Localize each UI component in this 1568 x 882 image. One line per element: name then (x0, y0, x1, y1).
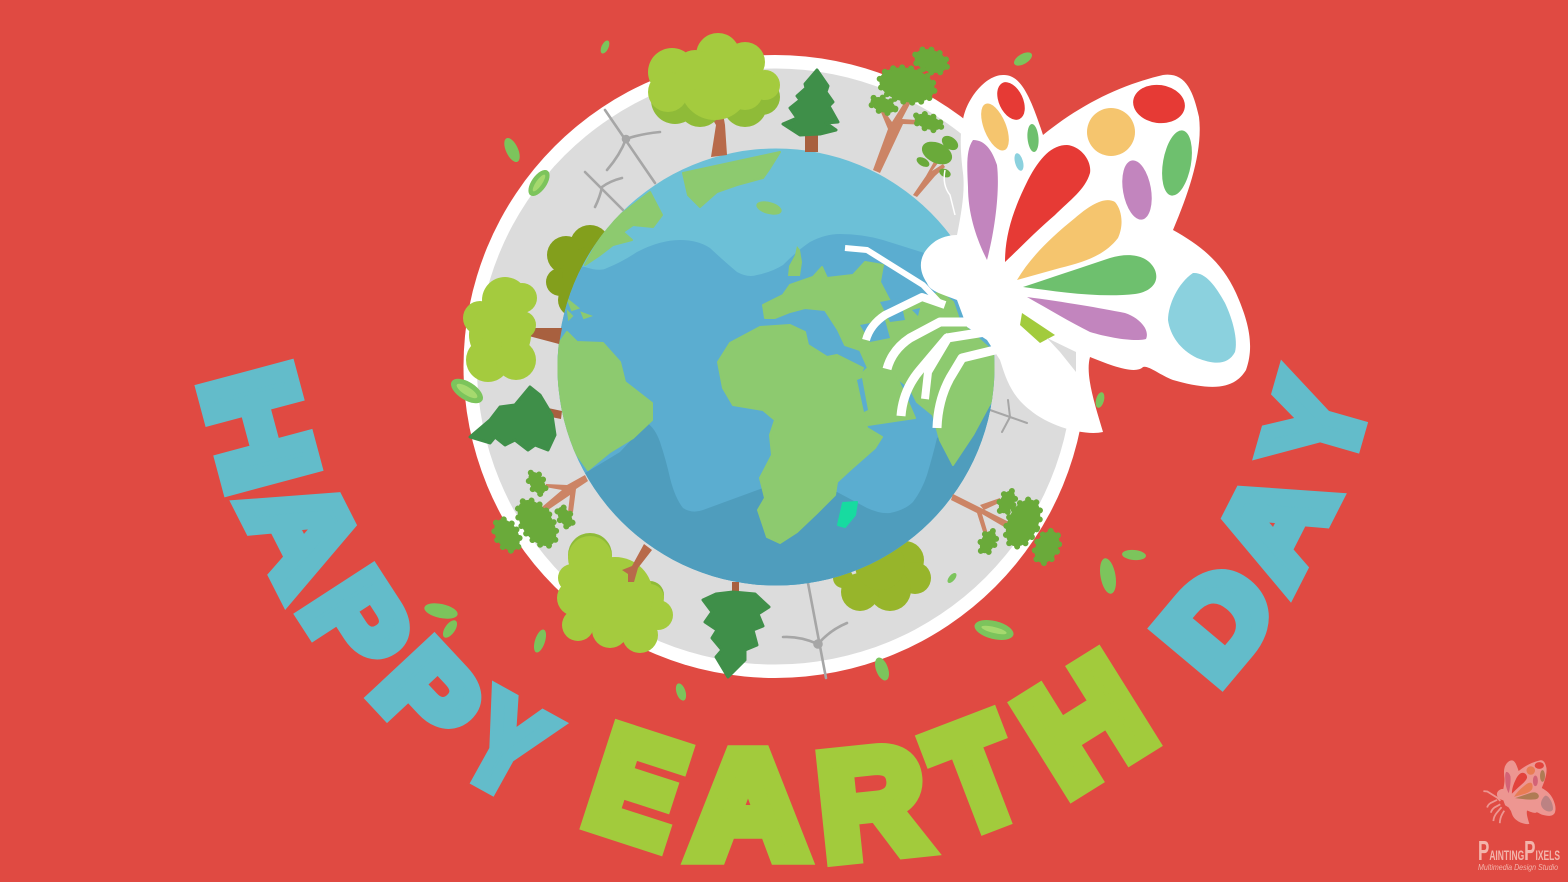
acacia tree lower left (489, 469, 588, 555)
land: Caribbean islands (568, 300, 590, 319)
legs and antenna (845, 170, 995, 428)
land: Madagascar (838, 502, 857, 527)
big lime tree at top (648, 33, 780, 157)
dark-blue southern ocean (585, 406, 991, 586)
word: DAY: A (1188, 446, 1360, 604)
white ring around the globe (464, 55, 1086, 678)
logo watermark (1478, 760, 1560, 872)
butterfly (845, 75, 1250, 433)
pine on left (470, 387, 562, 450)
word: DAY: Y (1237, 365, 1394, 483)
wing and body silhouette (921, 75, 1250, 433)
title: curved Happy Earth Day (175, 353, 1394, 882)
pine at top (783, 70, 838, 152)
grey ground disc (477, 68, 1073, 664)
land: small island (756, 201, 782, 215)
olive tree behind globe bottom right (833, 540, 931, 611)
wind turbine right (990, 400, 1027, 432)
word: EARTH: H (994, 625, 1176, 824)
land: northern landmass (683, 152, 780, 207)
lime tree on left (463, 277, 562, 382)
word: HAPPY: A (216, 453, 391, 611)
mid-blue ocean band (558, 234, 994, 586)
window in silhouette (1020, 313, 1055, 343)
trunk (705, 107, 727, 157)
word: HAPPY: Y (442, 669, 570, 824)
word: HAPPY (175, 353, 570, 824)
word: EARTH: T (914, 688, 1038, 862)
word: HAPPY: H (175, 353, 343, 504)
wing colour spots (992, 78, 1030, 124)
wind turbines upper left (585, 110, 660, 210)
word: HAPPY: P (349, 619, 507, 774)
logo butterfly (1483, 760, 1556, 824)
trunk (622, 544, 652, 582)
land: British isles (788, 246, 802, 276)
acacia tree small upper right (913, 133, 961, 197)
acacia tree upper right (868, 45, 951, 173)
globe (558, 148, 994, 586)
word: HAPPY: P (277, 550, 437, 696)
word: EARTH: E (572, 697, 702, 876)
inland seas (857, 298, 920, 412)
land: north west coast (585, 192, 662, 265)
word: DAY (1132, 365, 1394, 705)
word: EARTH (572, 625, 1176, 882)
land: Africa (718, 325, 882, 543)
land: Eurasia (763, 262, 1000, 465)
olive tree behind globe left (546, 225, 618, 317)
wind turbine bottom (783, 583, 847, 678)
big lime tree lower left (557, 533, 673, 653)
word: DAY: D (1132, 539, 1302, 705)
pine at bottom (703, 582, 769, 677)
land: South America (557, 332, 652, 470)
drifting leaves (423, 39, 1146, 702)
logo tagline: Multimedia Design Studio (1478, 863, 1558, 872)
acacia tree lower right (951, 488, 1064, 567)
